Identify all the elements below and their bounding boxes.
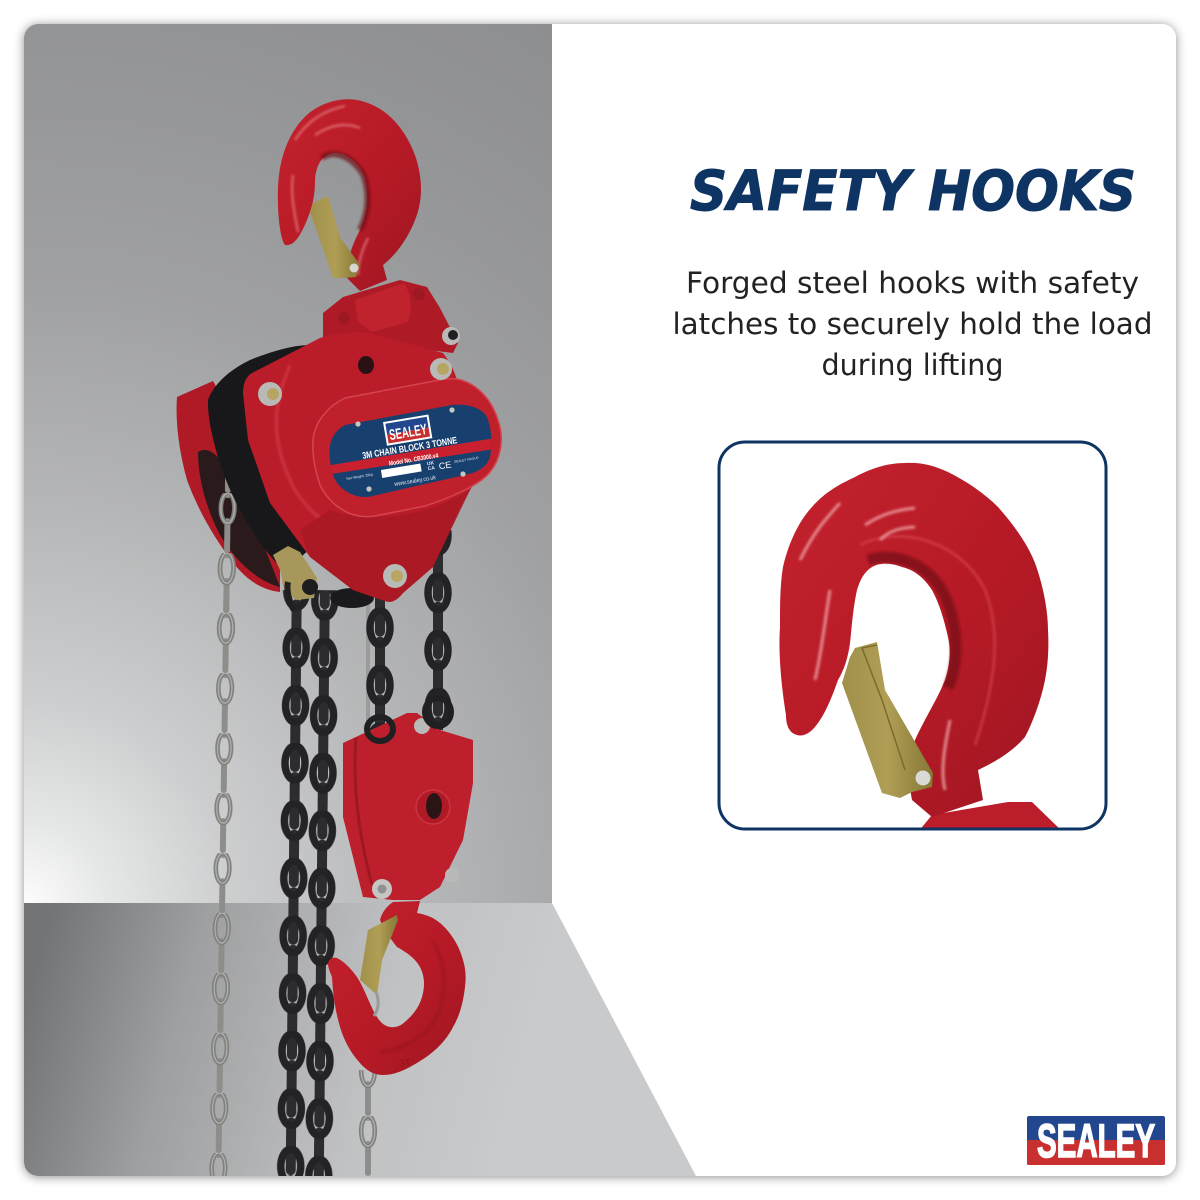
block body bbox=[177, 280, 501, 638]
label plate bbox=[325, 405, 495, 497]
gear cover bbox=[313, 379, 501, 517]
steel hand chain right bbox=[358, 600, 378, 1180]
floor bbox=[24, 903, 696, 1176]
steel chain over casing bbox=[216, 478, 238, 638]
panel: product photo bbox=[24, 24, 696, 1200]
close-up highlights bbox=[800, 503, 950, 790]
close-up ridge bbox=[860, 536, 995, 745]
label text: Net Weight: 29kg bbox=[346, 472, 373, 481]
inset panel: hook close-up bbox=[719, 442, 1106, 832]
vent hole bbox=[358, 356, 374, 374]
top hook bbox=[278, 99, 421, 291]
front casing bbox=[243, 332, 472, 602]
close-up latch bbox=[842, 642, 933, 798]
description text: Forged steel hooks with safety bbox=[686, 266, 1139, 300]
lower block seam bbox=[355, 738, 372, 885]
label rivets bbox=[355, 407, 466, 492]
dark underside bbox=[330, 588, 374, 608]
casing lower shade bbox=[300, 490, 470, 602]
label text: SEALEY GROUP bbox=[454, 456, 479, 464]
bolts bbox=[258, 327, 460, 588]
chain guide bracket bbox=[273, 546, 317, 600]
description text: latches to securely hold the load bbox=[672, 307, 1152, 341]
top hook highlights bbox=[292, 106, 368, 275]
bottom hook latch bbox=[360, 915, 398, 995]
black load chains bbox=[275, 530, 453, 1200]
label stripe bbox=[325, 438, 495, 475]
bottom hook bbox=[328, 901, 466, 1075]
label text: www.sealey.co.uk bbox=[393, 475, 437, 488]
top swivel bbox=[323, 280, 458, 353]
rear casing bbox=[177, 381, 280, 592]
black divider bbox=[208, 345, 306, 564]
label text: UK bbox=[426, 460, 435, 467]
label text: Model No. CB3000.v4 bbox=[388, 452, 439, 468]
label text bbox=[346, 414, 478, 486]
hook marking: 3T bbox=[399, 1057, 412, 1070]
casing opening bbox=[198, 450, 280, 587]
label text: CA bbox=[427, 465, 436, 472]
heading: SAFETY HOOKS bbox=[690, 159, 1136, 223]
description text: during lifting bbox=[822, 348, 1004, 382]
label logo: SEALEY bbox=[388, 421, 428, 444]
label text: 3M CHAIN BLOCK 3 TONNE bbox=[362, 435, 458, 462]
label logo bbox=[383, 414, 432, 446]
top hook inner shading bbox=[322, 154, 368, 230]
casing highlight bbox=[274, 365, 320, 518]
lower block boss bbox=[416, 790, 450, 824]
close-up hook bbox=[779, 463, 1048, 817]
lower block bbox=[343, 698, 473, 900]
close-up inner shading bbox=[868, 557, 956, 688]
bottom hook ridge bbox=[380, 940, 444, 1052]
label text: CE bbox=[438, 459, 452, 471]
steel hand chain left bbox=[209, 551, 236, 1176]
close-up swivel bbox=[922, 802, 1058, 828]
wall bbox=[24, 24, 552, 904]
top hook latch bbox=[310, 196, 360, 278]
description text bbox=[672, 266, 1152, 382]
